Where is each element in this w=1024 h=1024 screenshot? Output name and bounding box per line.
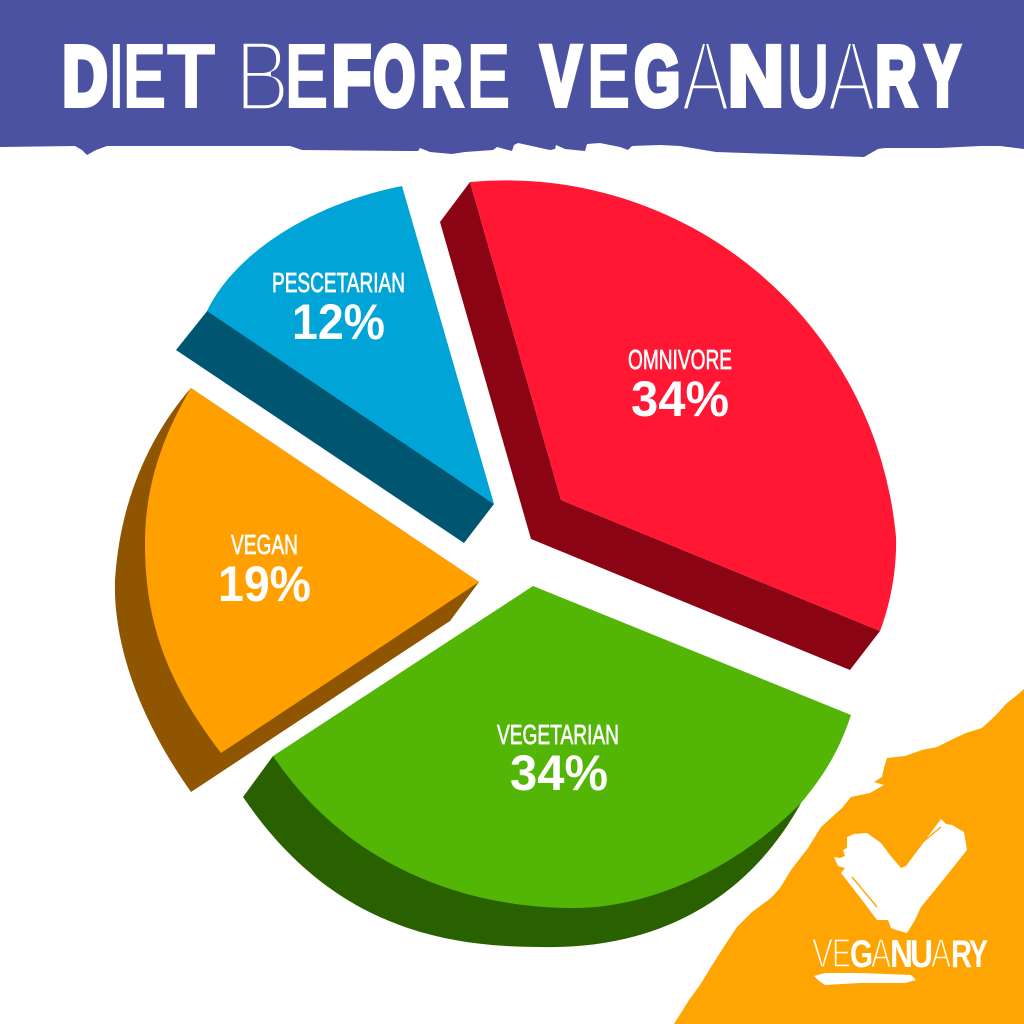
title: B [235,20,290,132]
wordmark: U [910,933,933,976]
pie chart [115,180,896,947]
title: E [284,24,329,128]
brush underline [814,973,916,985]
label: vegetarian: VEGETARIAN [497,719,619,750]
title: R [422,29,462,123]
title: U [787,24,829,128]
title: F [332,29,371,123]
title: A [828,20,876,132]
wordmark: A [871,930,891,976]
wordmark: E [832,930,851,976]
wordmark: R [951,933,972,976]
veganuary logo [812,819,988,985]
slice: omnivore [440,180,896,670]
title: O [374,29,415,123]
icon: brush streaks [852,827,941,907]
title: R [876,29,916,123]
wordmark: A [931,930,951,976]
title: E [122,24,167,128]
title banner [0,0,1024,157]
wordmark: Y [969,933,988,976]
slice: vegetarian [243,586,851,947]
title: G [634,29,680,123]
label: vegan: VEGAN [231,529,298,560]
title: I [106,24,127,128]
wordmark: V [812,930,833,976]
title: Y [925,29,960,123]
slice: vegan [115,388,479,792]
wordmark: G [850,933,873,976]
label: pescetarian: PESCETARIAN [272,267,405,298]
icon: brush heart [834,819,967,933]
value: pescetarian: 12% [292,294,385,350]
wordmark: N [890,933,913,976]
value: omnivore: 34% [631,371,729,427]
slice: pescetarian [176,186,494,543]
value: vegetarian: 34% [510,745,608,801]
title: D [62,29,108,123]
label: omnivore: OMNIVORE [628,344,732,375]
title: T [166,24,216,128]
title: N [728,29,784,123]
title: E [586,24,631,128]
title: E [466,24,511,128]
title: V [541,29,581,123]
corner brush panel [674,689,1024,1024]
value: vegan: 19% [218,556,311,612]
title: A [682,20,730,132]
